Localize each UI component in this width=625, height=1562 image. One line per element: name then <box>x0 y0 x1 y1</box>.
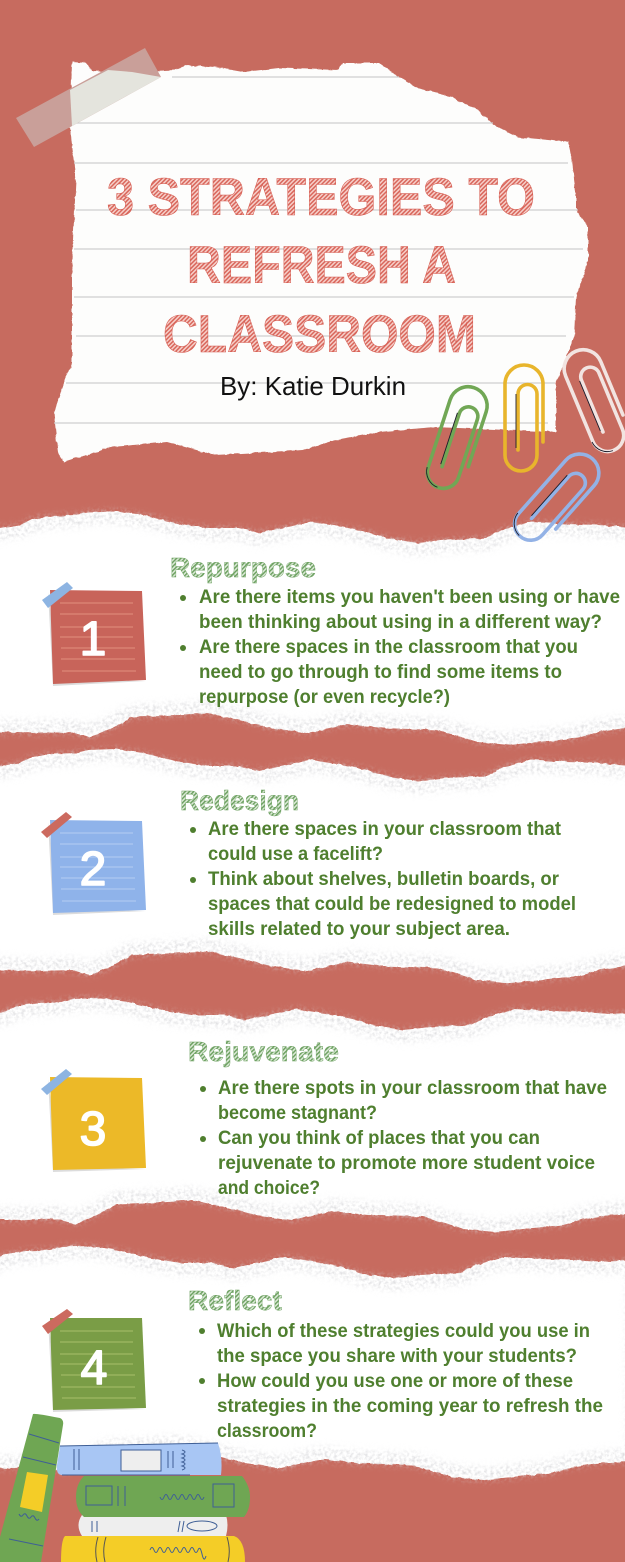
bullet list: Which of these strategies could you use in <box>217 1321 590 1342</box>
bullet list <box>199 1321 603 1442</box>
sticky note 2 <box>41 812 146 915</box>
bullet list: could use a facelift? <box>208 844 383 865</box>
bullet list: the space you share with your students? <box>217 1346 577 1367</box>
heading: Reflect <box>188 1285 282 1316</box>
title: REFRESH A <box>187 236 456 295</box>
sticky note 3: 3 <box>80 1103 106 1156</box>
sticky note 4: 4 <box>81 1342 107 1395</box>
sticky note 4 <box>42 1309 146 1412</box>
bullet list <box>180 587 620 708</box>
book: blue <box>57 1443 222 1475</box>
heading: Repurpose <box>170 552 316 583</box>
bullet list: Are there spaces in the classroom that you <box>199 637 578 658</box>
washi tape <box>16 48 161 147</box>
paperclips <box>422 344 625 551</box>
bullet list: How could you use one or more of these <box>217 1371 573 1392</box>
icon: green paperclip <box>422 382 492 494</box>
torn notebook paper <box>54 62 588 462</box>
section 4: Reflect <box>42 1285 603 1442</box>
title: CLASSROOM <box>163 305 476 364</box>
book: green <box>76 1476 250 1517</box>
bullet list: Are there spaces in your classroom that <box>208 819 562 840</box>
section 3: Rejuvenate <box>41 1036 607 1199</box>
byline: By: Katie Durkin <box>220 371 406 401</box>
title <box>107 168 535 364</box>
book: leaning green <box>0 1414 63 1562</box>
heading: Redesign <box>180 785 299 816</box>
section 1: Repurpose <box>42 552 620 708</box>
stack of books <box>0 1414 250 1562</box>
bullet list: repurpose (or even recycle?) <box>199 687 450 708</box>
bullet list <box>200 1078 607 1199</box>
icon: pale paperclip <box>557 344 625 457</box>
bullet list: Think about shelves, bulletin boards, or <box>208 869 560 890</box>
bullet list: Are there spots in your classroom that have <box>218 1078 607 1099</box>
book: yellow <box>61 1536 245 1562</box>
sticky note 1: 1 <box>80 613 106 666</box>
bullet list: become stagnant? <box>218 1103 377 1124</box>
bullet list: rejuvenate to promote more student voice <box>218 1153 595 1174</box>
icon: yellow paperclip <box>505 365 543 471</box>
bullet list: need to go through to find some items to <box>199 662 562 683</box>
heading: Rejuvenate <box>188 1036 339 1067</box>
title: 3 STRATEGIES TO <box>107 168 535 227</box>
sticky note 3 <box>41 1069 146 1172</box>
torn white bands <box>0 511 625 1480</box>
bullet list: spaces that could be redesigned to model <box>208 894 576 915</box>
bullet list: Are there items you haven't been using or have <box>199 587 620 608</box>
bullet list: skills related to your subject area. <box>208 919 510 940</box>
bullet list: Can you think of places that you can <box>218 1128 540 1149</box>
section 2: Redesign <box>41 785 576 940</box>
bullet list: and choice? <box>218 1178 320 1199</box>
bullet list: classroom? <box>217 1421 317 1442</box>
sticky note 2: 2 <box>80 843 106 896</box>
bullet list: strategies in the coming year to refresh the <box>217 1396 603 1417</box>
icon: blue paperclip <box>507 446 607 551</box>
book: white <box>78 1515 228 1536</box>
sticky note 1 <box>42 582 146 686</box>
bullet list <box>190 819 576 940</box>
bullet list: been thinking about using in a different way? <box>199 612 602 633</box>
